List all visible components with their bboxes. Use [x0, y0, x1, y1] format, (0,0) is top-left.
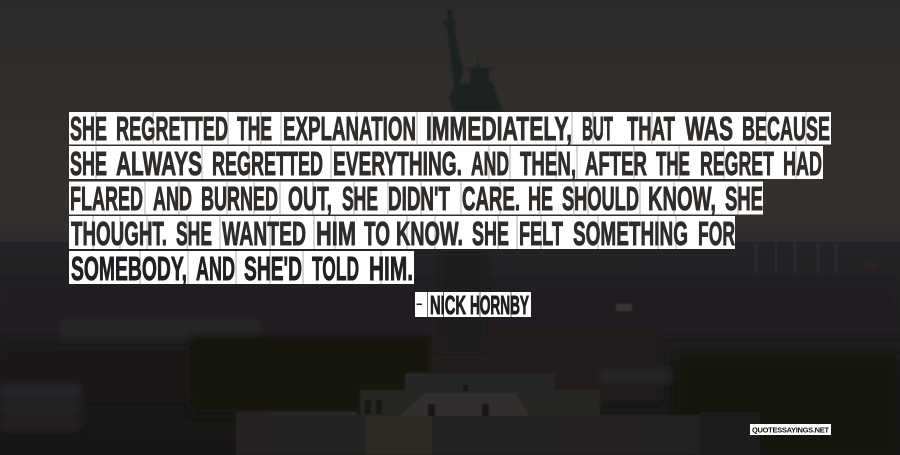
line 1: REGRETTED: [116, 110, 228, 147]
line 2: AFTER: [585, 145, 647, 182]
line 2: THE: [656, 145, 690, 182]
flag: [616, 304, 632, 311]
line 3: BURNED: [201, 180, 278, 217]
line 3: SHE: [342, 180, 378, 217]
line 1: BUT: [582, 110, 613, 147]
line 4: WANTED: [222, 215, 306, 252]
statue silhouette: [442, 10, 503, 112]
watermark: quotessayings.net: QUOTESSAYINGS.NET: [752, 426, 829, 434]
line 2: HAD: [783, 145, 822, 182]
line 4: [69, 215, 735, 252]
author attribution: HORNBY: [470, 290, 529, 320]
line 5: [69, 250, 414, 287]
fort wall: [237, 415, 700, 455]
line 2: EVERYTHING.: [333, 145, 462, 182]
quote text: [69, 110, 831, 287]
line 2: REGRETTED: [212, 145, 323, 182]
line 1: BECAUSE: [742, 110, 830, 147]
line 2: REGRET: [700, 145, 774, 182]
line 4: SHE: [472, 215, 509, 252]
line 4: TO: [364, 215, 390, 252]
pedestal behind quote: [437, 250, 489, 350]
line 1: EXPLANATION: [283, 110, 416, 147]
line 2: SHE: [70, 145, 107, 182]
line 4: SHE: [176, 215, 212, 252]
star fort building: [360, 390, 600, 416]
line 1: THE: [237, 110, 272, 147]
line 3: OUT,: [288, 180, 332, 217]
line 1: IMMEDIATELY,: [426, 110, 572, 147]
distant pillars: [755, 243, 837, 273]
line 2: [69, 145, 823, 182]
line 4: FELT: [519, 215, 563, 252]
line 4: HIM: [316, 215, 356, 252]
line 5: AND: [196, 250, 235, 287]
line 4: FOR: [698, 215, 735, 252]
line 4: KNOW.: [396, 215, 463, 252]
line 3: CARE.: [462, 180, 520, 217]
line 1: [69, 110, 831, 147]
line 5: SOMEBODY,: [71, 250, 187, 287]
line 2: AND: [471, 145, 509, 182]
line 5: TOLD: [312, 250, 359, 287]
line 3: FLARED: [70, 180, 143, 217]
line 3: AND: [153, 180, 192, 217]
line 2: THEN,: [520, 145, 576, 182]
line 3: DIDN'T: [388, 180, 450, 217]
line 3: [69, 180, 763, 217]
line 4: THOUGHT.: [71, 215, 167, 252]
line 5: SHE'D: [244, 250, 302, 287]
line 3: HE: [528, 180, 553, 217]
line 3: KNOW,: [648, 180, 716, 217]
line 3: SHE: [725, 180, 763, 217]
line 2: ALWAYS: [116, 145, 202, 182]
line 4: SOMETHING: [573, 215, 688, 252]
author attribution: [415, 290, 531, 320]
line 1: SHE: [70, 110, 107, 147]
line 1: WAS: [685, 110, 733, 147]
line 3: SHOULD: [562, 180, 639, 217]
author attribution: NICK: [430, 290, 466, 320]
line 5: HIM.: [369, 250, 413, 287]
line 1: THAT: [627, 110, 675, 147]
